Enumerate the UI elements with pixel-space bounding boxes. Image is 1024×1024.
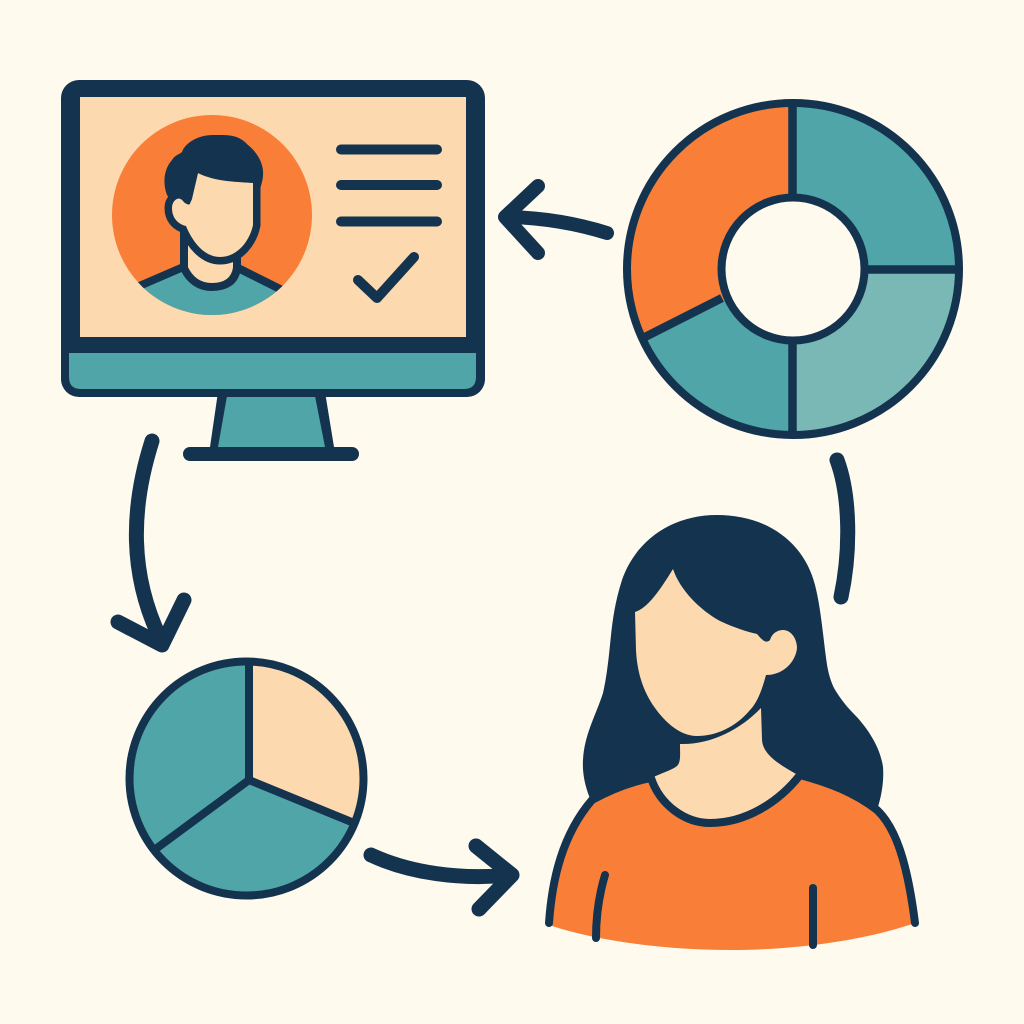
icon: check mark <box>358 257 414 298</box>
infographic canvas <box>61 80 963 950</box>
arrow: pie to woman <box>371 846 512 909</box>
shirt outline <box>549 775 915 923</box>
hair <box>583 515 883 830</box>
arrow: monitor to pie <box>118 441 184 645</box>
monitor screen <box>80 97 466 337</box>
donut hole <box>722 198 864 340</box>
shirt <box>549 775 915 950</box>
orange segment <box>627 103 793 338</box>
monitor body <box>61 80 485 397</box>
face and ear <box>635 569 797 736</box>
light teal segment <box>793 269 959 435</box>
sleeve lines <box>596 875 813 945</box>
profile avatar <box>112 115 312 315</box>
monitor stand <box>183 392 359 461</box>
monitor chin <box>69 353 476 389</box>
arrow: donut to monitor <box>505 186 607 253</box>
icon: donut chart <box>627 103 959 435</box>
arrow: donut to woman line <box>837 460 848 597</box>
text lines <box>341 150 437 222</box>
icon: pie chart <box>130 660 365 896</box>
segment dividers <box>645 103 959 435</box>
neck <box>651 708 798 823</box>
collar <box>651 775 800 823</box>
icon: computer monitor with profile <box>61 80 485 461</box>
icon: woman figure <box>549 515 915 950</box>
